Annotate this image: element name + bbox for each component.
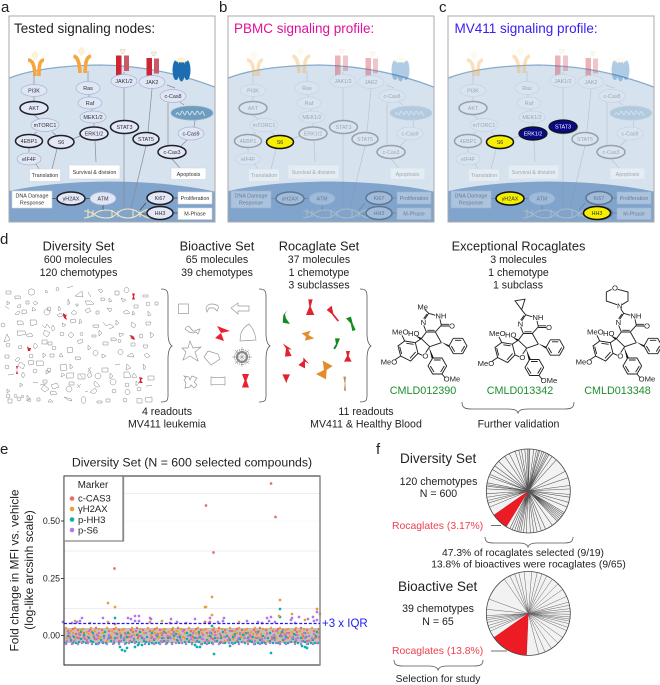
molecule CMLD012390: OMe — [444, 375, 460, 384]
faded network c: Ki67 — [594, 196, 604, 202]
molecule CMLD013342: MeO — [489, 329, 506, 338]
heading: diversity set: Diversity Set — [43, 238, 115, 254]
compound names — [390, 385, 651, 397]
faded network c: JAK1/2 — [554, 79, 572, 85]
scatter plot — [63, 476, 320, 665]
faded network b: STAT5 — [357, 137, 373, 143]
node labels a: Survival & division — [73, 170, 116, 176]
heading: diversity set: 600 molecules — [44, 254, 112, 266]
brace: selected — [485, 537, 573, 547]
faded network c: ATM — [537, 196, 548, 202]
node labels a: c-Cas3 — [163, 150, 181, 156]
node labels a: M-Phase — [184, 212, 206, 218]
node labels a: STAT3 — [117, 125, 132, 131]
faded network b: ATM — [317, 196, 328, 202]
stats: bioactive set: N = 65 — [422, 616, 454, 628]
molecule CMLD013348: MeO — [576, 357, 592, 366]
caption: 11 readouts: 11 readouts — [338, 406, 394, 418]
pie: diversity set chemotypes — [486, 448, 571, 534]
node labels a: JAK1/2 — [115, 79, 133, 85]
faded network b: mTORC1 — [253, 123, 275, 129]
faded network b: MEK1/2 — [302, 115, 322, 121]
cell background b — [228, 16, 434, 222]
faded network b: STAT3 — [336, 125, 351, 131]
signaling network a — [12, 47, 213, 220]
faded network c: Apoptosis — [616, 172, 640, 178]
faded network b: c-Cas9 — [401, 132, 419, 138]
stats: bioactive set: 39 chemotypes — [402, 603, 474, 615]
molecule CMLD013342: MeO — [478, 359, 494, 368]
heading: rocaglate set: 3 subclasses — [288, 280, 350, 292]
molecule CMLD013342: N — [518, 319, 523, 328]
faded network c: Response — [459, 200, 483, 206]
faded network c: M-Phase — [623, 212, 645, 218]
heading c: MV411 signaling profile: — [454, 21, 598, 36]
node labels a: MEK1/2 — [83, 115, 103, 121]
molecule CMLD013348: N — [616, 318, 621, 327]
faded network b: JAK1/2 — [334, 79, 352, 85]
heading: bioactive set: 39 chemotypes — [181, 267, 253, 279]
text: selection statistics: 13.8% of bioactives were rocaglates (9/65) — [431, 560, 626, 570]
legend: p-S6 — [78, 526, 98, 536]
faded network c: MEK1/2 — [522, 115, 542, 121]
molecule CMLD013348: O — [617, 351, 623, 360]
faded network c: mTORC1 — [473, 123, 495, 129]
heading: diversity set — [40, 238, 117, 279]
faded network b: M-Phase — [403, 212, 425, 218]
molecule CMLD013342: HO — [505, 330, 517, 339]
legend — [64, 476, 124, 541]
heading: diversity set: 120 chemotypes — [40, 267, 117, 279]
stats: diversity set: N = 600 — [420, 488, 457, 500]
pie: bioactive set chemotypes — [486, 571, 571, 656]
highlighted nodes c: HH3 — [592, 211, 602, 217]
molecule CMLD013342: OMe — [541, 376, 557, 385]
node labels a: Response — [20, 200, 44, 206]
panel letter e: e — [0, 441, 8, 458]
y axis label: Fold change in MFI vs. vehicle — [8, 489, 22, 652]
heading: rocaglate set: 1 chemotype — [289, 267, 349, 279]
threshold line — [64, 622, 320, 624]
faded network b: c-Cas3 — [382, 150, 400, 156]
faded network c — [451, 47, 652, 220]
highlighted nodes c: γH2AX — [502, 196, 519, 202]
faded network b: JAK2 — [365, 80, 377, 86]
faded network c: STAT5 — [577, 137, 593, 143]
panel letter f: f — [376, 441, 381, 458]
faded network b: γH2AX — [282, 196, 299, 202]
node labels a: mTORC1 — [34, 123, 56, 129]
heading a: Tested signaling nodes: — [14, 21, 155, 36]
cell background c — [448, 16, 654, 222]
caption: 4 readouts — [128, 406, 206, 430]
spiky ring icon — [232, 347, 252, 367]
node labels a — [16, 79, 209, 218]
compound names: CMLD012390 — [390, 385, 456, 397]
caption: further validation: Further validation — [478, 418, 560, 430]
faded network c: Proliferation — [620, 196, 648, 202]
heading: diversity set pie: Diversity Set — [400, 451, 477, 466]
legend: Marker — [78, 480, 109, 491]
faded network b: Proliferation — [400, 196, 428, 202]
text: selection statistics — [431, 548, 626, 570]
molecule CMLD012390: MeO — [381, 357, 397, 366]
faded network b: DNA Damage — [235, 194, 267, 200]
heading: bioactive set: 65 molecules — [186, 254, 248, 266]
node labels a: 4EBP1 — [21, 139, 37, 145]
marker band p-S6 — [64, 626, 320, 646]
panel c: MV411 signaling profile — [439, 0, 654, 222]
molecule CMLD012390: HO — [408, 329, 420, 338]
compound names: CMLD013342 — [487, 385, 553, 397]
heading: exceptional rocaglates: 1 subclass — [493, 280, 543, 292]
heading: bioactive set — [180, 238, 255, 279]
molecule CMLD013348: NH — [630, 312, 641, 321]
caption: 4 readouts: 4 readouts — [142, 406, 192, 418]
bioactive rocaglate icons — [215, 326, 249, 388]
highlighted node S6 b: S6 — [277, 140, 283, 146]
faded network c: 4EBP1 — [460, 139, 476, 145]
y axis label: (log-like arcsinh scale) — [22, 510, 36, 630]
marker band mixed — [64, 626, 320, 646]
faded network c: Raf — [525, 101, 534, 107]
brace after bioactive set — [259, 289, 270, 402]
faded network b: PI3K — [247, 88, 259, 94]
marker band p-HH3 — [64, 626, 320, 646]
faded network c: c-Cas9 — [621, 132, 639, 138]
rocaglate set shapes — [282, 299, 356, 391]
heading b: PBMC signaling profile: — [234, 21, 374, 36]
legend: c-CAS3 — [78, 494, 111, 504]
molecule CMLD013348: OMe — [639, 375, 655, 384]
node labels a: DNA Damage — [16, 194, 48, 200]
node labels a: ATM — [98, 196, 109, 202]
diversity set shape cloud — [1, 286, 158, 403]
molecule CMLD012390: MeO — [392, 327, 409, 336]
label: rocaglates 13.8%: Rocaglates (13.8%) — [392, 646, 483, 657]
y axis label — [8, 489, 36, 652]
molecule CMLD013348 — [576, 283, 660, 384]
molecule CMLD012390: N — [421, 318, 426, 327]
label: rocaglates 3.17%: Rocaglates (3.17%) — [392, 521, 483, 532]
faded network b: Response — [239, 200, 263, 206]
stats: diversity set — [400, 476, 477, 500]
faded network b: ERK1/2 — [304, 132, 322, 138]
molecule CMLD013348: O — [612, 283, 618, 292]
molecule CMLD013348: HO — [603, 329, 615, 338]
panel letter d: d — [0, 231, 8, 248]
node labels a: eIF4F — [22, 157, 37, 163]
molecule CMLD012390: O — [449, 321, 455, 330]
marker band c-CAS3 and gamma-H2AX — [64, 626, 320, 646]
faded network b: HH3 — [374, 211, 384, 217]
heading: exceptional rocaglates — [452, 238, 585, 292]
node labels a: γH2AX — [63, 196, 80, 202]
heading: exceptional rocaglates: 1 chemotype — [488, 267, 549, 279]
node labels a: STAT5 — [138, 137, 154, 143]
legend: p-HH3 — [78, 515, 105, 526]
outliers red — [114, 484, 276, 624]
node labels a: JAK2 — [146, 80, 158, 86]
legend: γH2AX — [78, 504, 108, 515]
threshold label: +3 x IQR — [322, 618, 368, 630]
faded network c: Survival & division — [512, 170, 555, 176]
highlighted nodes c: S6 — [497, 140, 503, 146]
faded network b — [231, 47, 432, 220]
molecule CMLD013348: N — [617, 302, 623, 311]
node labels a: AKT — [29, 106, 40, 112]
faded network b: Translation — [251, 173, 277, 179]
y axis ticks — [43, 516, 64, 640]
node labels a: Raf — [86, 101, 95, 107]
node labels a: Apoptosis — [177, 172, 201, 178]
y axis ticks: 0.00 — [43, 630, 60, 640]
panel b: PBMC signaling profile — [219, 0, 434, 222]
marker band base — [64, 628, 320, 643]
node labels a: PI3K — [28, 88, 40, 94]
brace: selection for study — [394, 660, 483, 670]
node labels a: c-Cas8 — [164, 94, 182, 100]
faded network c: PI3K — [467, 88, 479, 94]
faded network c: AKT — [468, 106, 479, 112]
node labels a: Ras — [83, 86, 93, 92]
outliers purple — [63, 612, 317, 623]
faded network c: JAK2 — [585, 80, 597, 86]
faded network c: c-Cas8 — [603, 94, 621, 100]
highlighted node S6 b — [266, 136, 294, 148]
faded network b: 4EBP1 — [240, 139, 256, 145]
stats: diversity set: 120 chemotypes — [400, 476, 477, 488]
molecule CMLD013348: MeO — [587, 327, 604, 336]
faded network b: Apoptosis — [396, 172, 420, 178]
stats: bioactive set — [402, 603, 474, 628]
heading: rocaglate set — [279, 238, 360, 292]
faded network b: Ras — [302, 86, 312, 92]
faded network b: Raf — [305, 101, 314, 107]
heading: exceptional rocaglates: 3 molecules — [490, 254, 547, 266]
compound names: CMLD013348 — [584, 385, 651, 397]
faded network b: Survival & division — [292, 170, 335, 176]
caption: 11 readouts — [310, 406, 422, 430]
panel a: tested signaling nodes — [1, 0, 215, 222]
faded network c: Translation — [471, 173, 497, 179]
molecule CMLD012390 — [381, 302, 467, 384]
highlighted nodes c: ERK1/2 — [524, 132, 542, 138]
brace: further validation — [462, 402, 574, 413]
brace after diversity set — [161, 289, 172, 402]
node labels a: Translation — [32, 173, 58, 179]
heading: exceptional rocaglates: Exceptional Rocaglates — [452, 238, 585, 254]
molecule CMLD013348: O — [644, 321, 650, 330]
faded network b: eIF4F — [241, 157, 256, 163]
faded network c: Ras — [522, 86, 532, 92]
heading: bioactive set: Bioactive Set — [180, 238, 255, 254]
node labels a: Ki67 — [155, 196, 165, 202]
molecule CMLD012390: O — [422, 351, 428, 360]
outliers orange — [75, 597, 320, 623]
molecule CMLD012390: NH — [435, 312, 446, 321]
heading: bioactive set pie: Bioactive Set — [398, 579, 478, 594]
caption: 11 readouts: MV411 & Healthy Blood — [310, 418, 422, 430]
node labels a: c-Cas9 — [182, 132, 200, 138]
molecule CMLD013342: O — [519, 353, 525, 362]
y axis ticks: 0.25 — [43, 574, 60, 584]
node labels a: Proliferation — [181, 196, 209, 202]
brace after rocaglate set — [360, 289, 371, 402]
caption: selection for study: Selection for study — [396, 674, 481, 685]
node labels a: S6 — [58, 140, 64, 146]
molecule CMLD013342 — [478, 299, 564, 385]
molecule CMLD013342: O — [546, 323, 552, 332]
y axis ticks: 0.50 — [43, 516, 60, 526]
highlighted nodes c: STAT3 — [555, 124, 571, 130]
faded network b: Ki67 — [374, 196, 384, 202]
caption: 4 readouts: MV411 leukemia — [128, 418, 206, 430]
outliers teal — [115, 609, 307, 654]
chart title: Diversity Set (N = 600 selected compounds) — [72, 456, 312, 470]
molecule CMLD013342: NH — [532, 313, 543, 322]
cell background a — [9, 16, 215, 222]
molecule CMLD012390: Me — [417, 302, 428, 311]
heading: rocaglate set: 37 molecules — [288, 254, 350, 266]
highlighted nodes c — [486, 120, 610, 220]
heading: rocaglate set: Rocaglate Set — [279, 238, 360, 254]
node labels a: HH3 — [155, 211, 165, 217]
bioactive set shapes — [178, 303, 256, 388]
node labels a: ERK1/2 — [85, 132, 103, 138]
faded network c: c-Cas3 — [602, 150, 620, 156]
text: selection statistics: 47.3% of rocaglates selected (9/19) — [442, 548, 604, 559]
faded network c: eIF4F — [461, 157, 476, 163]
faded network b: c-Cas8 — [383, 94, 401, 100]
faded network c: DNA Damage — [455, 194, 487, 200]
faded network b: AKT — [248, 106, 259, 112]
